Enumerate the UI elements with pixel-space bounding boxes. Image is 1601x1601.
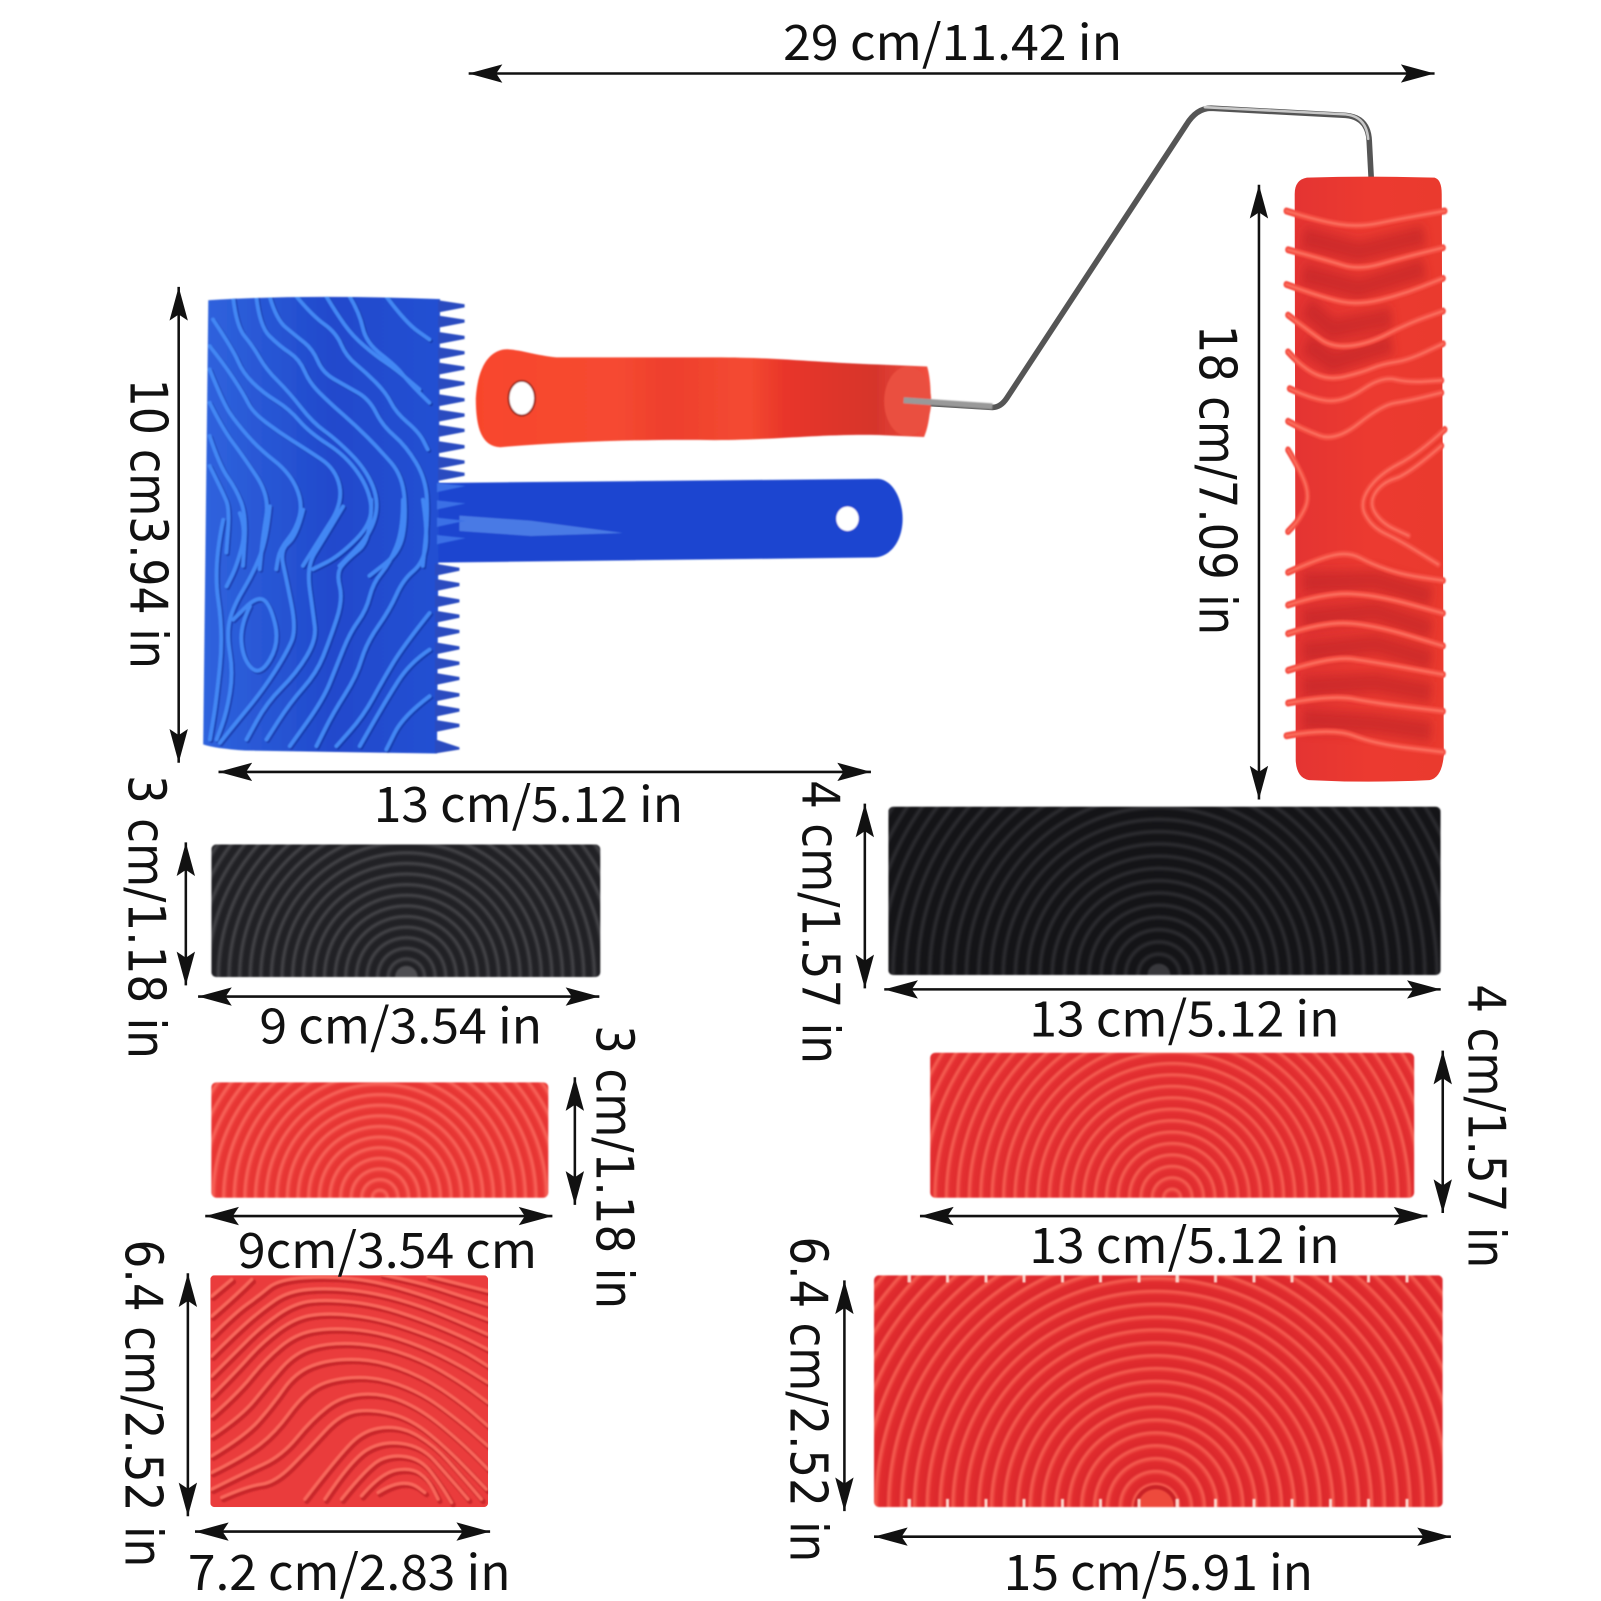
dimension: small black tool height 3 cm: 3 cm/1.18 in	[116, 775, 176, 1059]
dimension: medium red tool height 4 cm: 4 cm/1.57 in	[1455, 984, 1515, 1268]
blue comb handle	[434, 479, 903, 563]
panel: large black grain tool	[888, 807, 1441, 975]
handle end cap	[884, 367, 931, 436]
comb teeth	[435, 300, 465, 754]
dimension: comb width 13 cm: 13 cm/5.12 in	[374, 766, 683, 837]
red roller handle	[476, 349, 992, 447]
wire frame of the roller	[909, 107, 1371, 407]
roller ridges	[1286, 211, 1445, 752]
panel: small red grain tool	[211, 1082, 548, 1198]
comb connector spikes	[437, 483, 466, 544]
panel: small black grain tool	[211, 844, 600, 977]
dimension: medium red tool width 13 cm: 13 cm/5.12 in	[1029, 1207, 1340, 1278]
panel: square red grain tool	[210, 1274, 490, 1507]
exposed wire	[904, 400, 992, 406]
roller dark bands	[1303, 235, 1431, 732]
top notches	[874, 1275, 1443, 1282]
roller body	[1295, 177, 1444, 782]
handle hole	[836, 506, 859, 531]
blue grain comb	[203, 296, 466, 754]
dimension: large black tool height 4 cm: 4 cm/1.57 in	[790, 780, 850, 1064]
dimension: small red tool height 3 cm: 3 cm/1.18 in	[583, 1025, 643, 1309]
dimension: roller length 18 cm: 18 cm/7.09 in	[1187, 325, 1247, 635]
flowing grain ridges	[212, 1274, 490, 1505]
comb grain ridges	[210, 296, 431, 751]
dimension: small black tool width 9 cm: 9 cm/3.54 in	[259, 988, 542, 1059]
dimension: comb height 10 cm: 10 cm3.94 in	[118, 379, 178, 669]
handle hole	[508, 381, 535, 416]
dimension: large black tool width 13 cm: 13 cm/5.12 in	[1029, 980, 1340, 1051]
bottom notches	[874, 1499, 1443, 1507]
handle highlight	[459, 516, 623, 536]
panel: medium red grain tool	[930, 1053, 1414, 1198]
comb body	[203, 297, 440, 754]
dimension: small red tool width 9 cm: 9cm/3.54 cm	[238, 1212, 537, 1283]
panel: large red grain tool	[874, 1275, 1443, 1507]
dimension: overall width 29 cm: 29 cm/11.42 in	[783, 4, 1122, 75]
red grain roller	[1286, 177, 1445, 782]
